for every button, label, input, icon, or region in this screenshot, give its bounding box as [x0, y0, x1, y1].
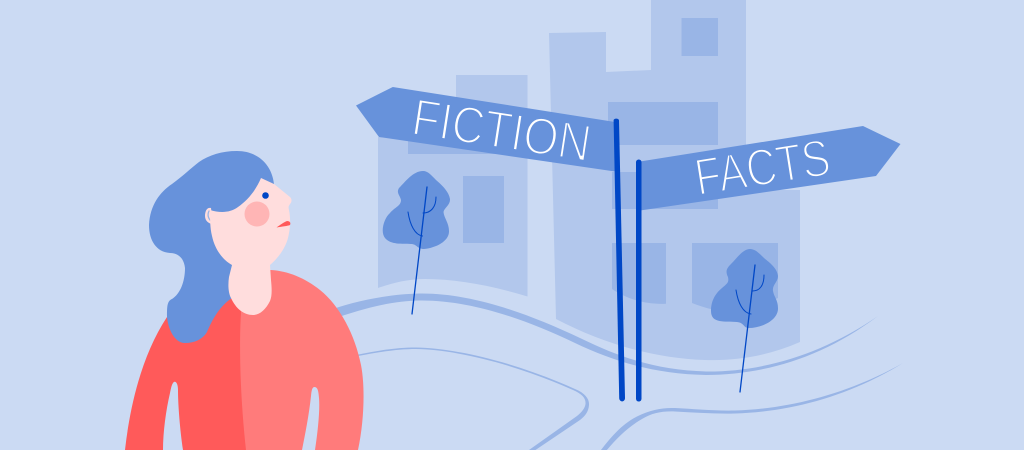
sign text: fiction: FICTION — [408, 89, 595, 173]
person — [125, 151, 364, 450]
head and neck — [210, 178, 292, 315]
window: tower lower — [612, 172, 718, 209]
tree trunk and branches — [736, 265, 764, 392]
sign: facts — [640, 126, 900, 210]
signpost: left pole — [614, 119, 625, 401]
body: jumper dark side — [125, 297, 246, 450]
building: left — [378, 75, 528, 296]
sign: fiction — [356, 87, 615, 173]
tree: left — [383, 171, 450, 314]
tree trunk and branches — [408, 187, 436, 314]
window: left building upper — [408, 120, 508, 154]
eye — [262, 192, 269, 199]
road: thin lower-left path — [350, 348, 589, 450]
window: tower middle — [608, 102, 718, 145]
mouth — [276, 221, 290, 228]
window: tower bottom right — [692, 243, 778, 315]
tree: right — [711, 249, 778, 392]
ear detail — [208, 211, 214, 223]
ear — [205, 208, 213, 224]
signpost: right pole — [636, 160, 642, 402]
body: jumper light side — [235, 270, 364, 450]
cheek — [244, 202, 270, 226]
window: tower bottom left — [612, 243, 666, 304]
road: thick upper path — [325, 293, 878, 375]
building: centre tower — [549, 0, 800, 360]
sign text: facts: FACTS — [691, 129, 834, 207]
hair — [149, 151, 274, 343]
window: left building lower — [463, 176, 504, 243]
window: tower top — [682, 18, 718, 56]
road: lower-right path — [601, 363, 903, 450]
